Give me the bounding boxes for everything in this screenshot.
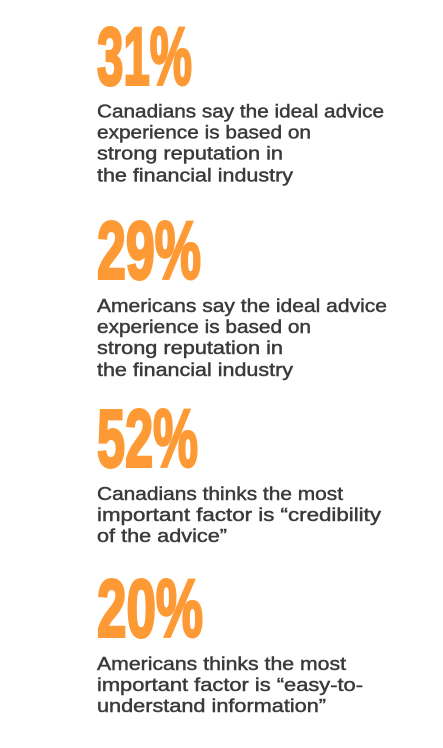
description: Americans reputation: [97, 295, 387, 380]
description: Canadians credibility: [97, 483, 382, 546]
description: Americans easy-to-understand: important factor is “easy-to-: [97, 674, 363, 695]
description: Canadians reputation: [97, 100, 384, 186]
description: Canadians reputation: strong reputation in: [97, 142, 283, 164]
description: Americans reputation: experience is based on: [97, 316, 311, 337]
description: Americans easy-to-understand: Americans thinks the most: [97, 653, 346, 674]
description: Americans easy-to-understand: [97, 653, 363, 716]
description: Americans reputation: Americans say the ideal advice: [97, 295, 387, 316]
description: Canadians credibility: of the advice”: [97, 525, 227, 546]
stat block: 52% Canadians credibility: [97, 394, 382, 546]
stat block: 20% Americans easy-to-understand: [97, 564, 363, 716]
stat block: 29% Americans reputation: [97, 206, 387, 380]
big number: 29%: 29%: [97, 206, 201, 296]
description: Americans reputation: the financial industry: [97, 359, 294, 380]
description: Canadians reputation: Canadians say the ideal advice: [97, 100, 384, 122]
description: Canadians reputation: the financial industry: [97, 164, 294, 186]
description: Canadians credibility: important factor is “credibility: [97, 504, 382, 525]
description: Canadians reputation: experience is based on: [97, 122, 311, 142]
description: Canadians credibility: Canadians thinks the most: [97, 483, 343, 504]
big number: 20%: 20%: [97, 564, 203, 654]
big number: 52%: 52%: [97, 394, 198, 484]
description: Americans reputation: strong reputation in: [97, 337, 283, 358]
stat block: 31% Canadians reputation: [97, 12, 384, 186]
big number: 31%: 31%: [97, 12, 192, 102]
description: Americans easy-to-understand: understand information”: [97, 695, 326, 716]
